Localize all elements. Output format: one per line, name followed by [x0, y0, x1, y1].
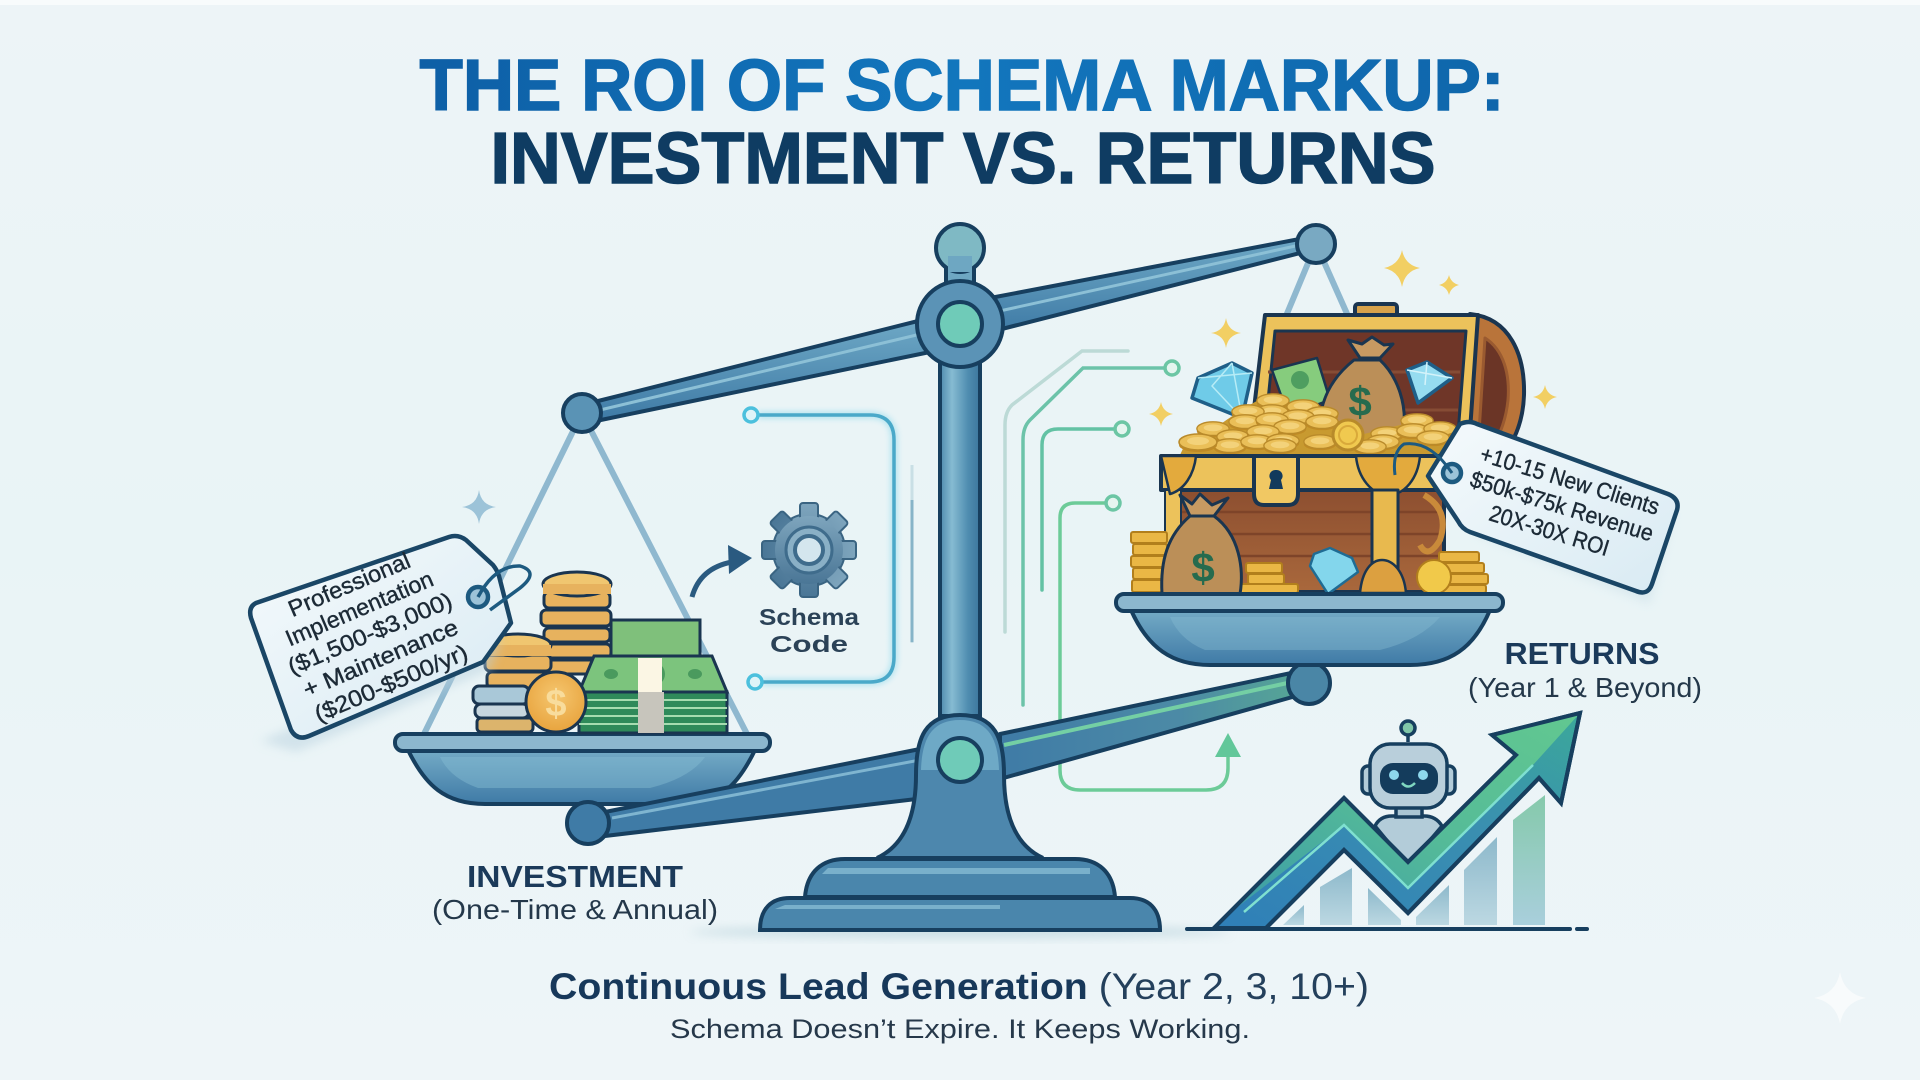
bill in chest: [1272, 358, 1330, 415]
growth chart: [1187, 713, 1587, 929]
label: investment: INVESTMENT: [467, 859, 683, 894]
coin pile: [1179, 394, 1456, 456]
treasure chest: [1131, 304, 1524, 594]
tall coin stack: [541, 572, 611, 674]
title: INVESTMENT VS. RETURNS: [490, 119, 1436, 199]
price tag: investment: Implementation: [281, 566, 437, 651]
left pan: [395, 734, 770, 804]
circuit lines: returns output: [1005, 351, 1241, 790]
price tag: returns: +10-15 New Clients: [1477, 441, 1663, 520]
short coin stack: [485, 634, 551, 688]
coin stacks and bag at chest base: [1131, 494, 1488, 594]
chart bars: [1283, 795, 1545, 925]
label: returns: [1468, 636, 1702, 703]
rising arrow: [1214, 713, 1580, 928]
bottom heading: Continuous Lead Generation (Year 2, 3, 10+): [549, 966, 1369, 1007]
watermark sparkle: [1814, 972, 1866, 1024]
front bills stack: [579, 692, 727, 733]
label: schema code: [759, 604, 859, 657]
gold sparkles: [1149, 250, 1557, 426]
chart baseline: [1187, 927, 1587, 931]
right pan: [1116, 594, 1503, 665]
coin stacks and bag at chest base: $: [1191, 544, 1215, 591]
label: schema code: Code: [770, 631, 848, 657]
back bills: [611, 620, 700, 660]
chest body: [1161, 456, 1445, 592]
lid: [1248, 304, 1524, 460]
label: investment: (One-Time & Annual): [432, 894, 718, 925]
left pan strings: [424, 413, 747, 734]
big dollar coin: [526, 672, 586, 732]
price tag: investment: Professional: [284, 547, 414, 622]
silver coin stack: [473, 686, 533, 732]
lower beam: [605, 672, 1296, 836]
ground shadow: [690, 926, 1230, 938]
icon: gear: [762, 503, 856, 597]
diamonds upper: [1192, 362, 1452, 418]
price tag: returns: $50k-$75k Revenue: [1467, 466, 1657, 546]
money pile: investment: [473, 572, 727, 733]
label: returns: (Year 1 & Beyond): [1468, 672, 1702, 703]
treasure chest: $: [1348, 378, 1372, 425]
label: returns: RETURNS: [1504, 636, 1660, 671]
price tag: returns: [1394, 422, 1678, 604]
right pan strings: [1286, 244, 1348, 316]
circuit lines: schema input: [744, 408, 912, 689]
robot: [1362, 721, 1455, 866]
price tag: investment: ($200-$500/yr): [310, 639, 471, 727]
price tag: returns: 20X-30X ROI: [1486, 500, 1612, 561]
icon: curved arrow to gear: [692, 545, 752, 597]
sparkle: left decorative star: [462, 490, 496, 524]
money bag behind coins: [1319, 337, 1404, 440]
dollar sign on coin: $: [545, 683, 567, 725]
left ball of lower beam: [567, 802, 609, 844]
bottom subheading: Schema Doesn’t Expire. It Keeps Working.: [670, 1014, 1250, 1044]
label: schema code: Schema: [759, 604, 859, 630]
price tag: investment: ($1,500-$3,000): [284, 587, 456, 680]
price tag: investment: + Maintenance: [299, 614, 462, 702]
price tag: investment: [250, 536, 530, 752]
label: investment: [432, 859, 718, 925]
title: THE ROI OF SCHEMA MARKUP:: [420, 46, 1504, 126]
scale column: [760, 224, 1160, 930]
title: [420, 46, 1504, 199]
upper beam: [563, 225, 1335, 432]
right ball of lower beam: [1288, 662, 1330, 704]
